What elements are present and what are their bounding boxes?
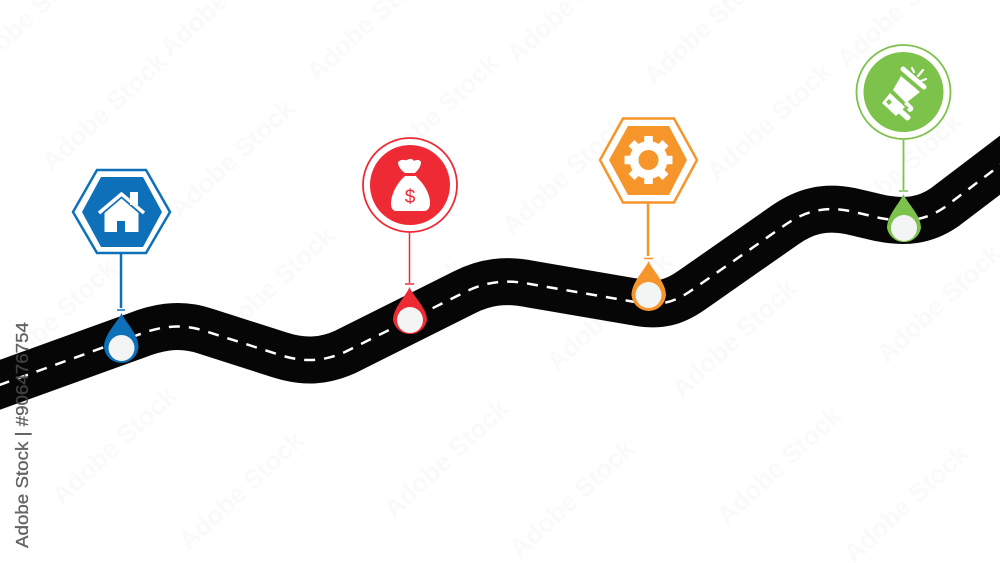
watermark pattern: Adobe Stock <box>666 273 803 404</box>
circle badge: red <box>363 138 457 232</box>
watermark pattern: Adobe Stock <box>504 433 641 563</box>
side credit text: Adobe Stock | #906476754 <box>12 322 32 548</box>
watermark pattern: Adobe Stock <box>496 110 633 241</box>
icon: house <box>99 192 144 232</box>
milestone 1: home <box>73 170 170 363</box>
watermark pattern: Adobe Stock <box>701 56 838 187</box>
icon: money bag: $ <box>405 187 416 208</box>
watermark pattern: Adobe Stock <box>46 380 183 511</box>
pin: blue drop <box>104 313 138 363</box>
hexagon badge: blue <box>73 170 170 253</box>
pin: red drop <box>393 287 427 334</box>
connector stem <box>644 203 653 258</box>
icon: money bag <box>391 159 430 211</box>
watermark pattern: Adobe Stock <box>173 425 310 556</box>
watermark pattern: Adobe Stock <box>164 93 301 224</box>
watermark pattern: Adobe Stock <box>36 46 173 177</box>
milestone 3: settings <box>600 118 697 311</box>
icon: megaphone <box>882 68 926 121</box>
milestone 2: money <box>363 138 457 334</box>
connector stem <box>405 232 414 284</box>
road <box>0 150 1000 392</box>
milestone 4: marketing <box>856 45 950 242</box>
watermark pattern: Adobe Stock <box>831 106 968 237</box>
watermark pattern: Adobe Stock <box>204 220 341 351</box>
hexagon badge: orange <box>600 118 697 202</box>
watermark pattern: Adobe Stock <box>368 48 505 179</box>
connector stem <box>899 140 908 191</box>
pin: green drop <box>887 194 921 242</box>
watermark pattern: Adobe Stock <box>334 253 471 384</box>
pin: orange drop <box>632 261 666 311</box>
watermark pattern: Adobe Stock <box>541 246 678 377</box>
icon: gear <box>624 136 672 184</box>
watermark pattern: Adobe Stock <box>378 393 515 524</box>
watermark pattern: Adobe Stock <box>711 400 848 531</box>
connector stem <box>117 254 125 310</box>
circle badge: green <box>856 45 950 139</box>
